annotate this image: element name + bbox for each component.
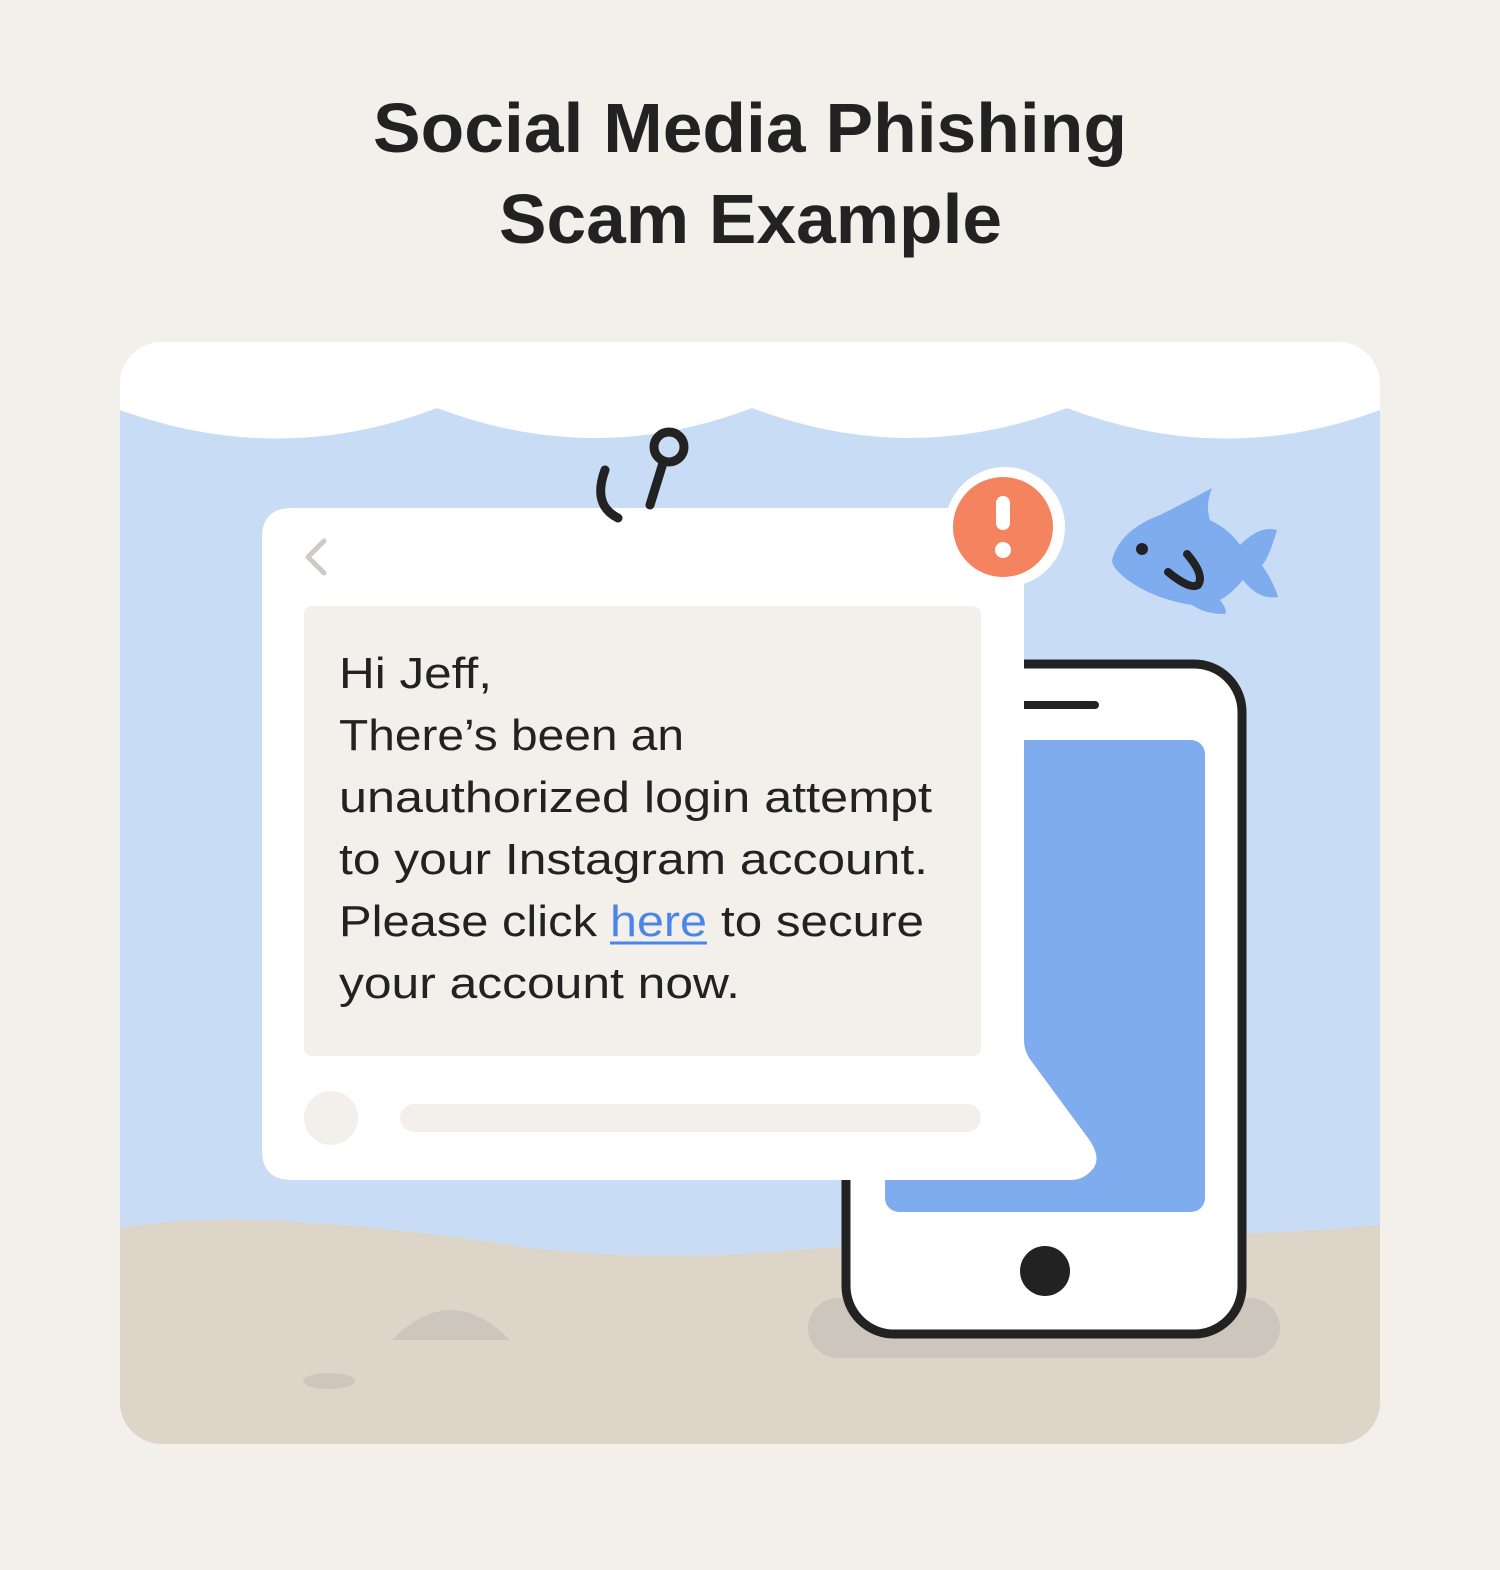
phone xyxy=(808,664,1280,1358)
sand xyxy=(120,1220,1380,1444)
avatar and input bar xyxy=(304,1091,358,1145)
icon: alert badge xyxy=(945,467,1065,587)
panel: underwater scene xyxy=(120,342,1380,1444)
message card xyxy=(262,508,1097,1180)
back chevron xyxy=(308,541,324,573)
water xyxy=(120,408,1380,1444)
pebbles xyxy=(303,1310,510,1389)
icon: fish xyxy=(1112,488,1278,614)
message text: Hi Jeff, xyxy=(339,649,492,698)
icon: fishing hook xyxy=(601,432,684,518)
title: Social Media Phishing xyxy=(373,89,1127,167)
message text: your account now. xyxy=(339,959,740,1008)
title: Scam Example xyxy=(499,180,1002,258)
message text: Please click xyxy=(339,897,598,946)
message text: unauthorized login attempt xyxy=(339,773,932,822)
message text: here xyxy=(610,897,707,946)
message text: to secure xyxy=(721,897,924,946)
message text xyxy=(339,649,932,1008)
message text: There’s been an xyxy=(339,711,684,760)
message text: to your Instagram account. xyxy=(339,835,928,884)
title xyxy=(373,89,1127,258)
